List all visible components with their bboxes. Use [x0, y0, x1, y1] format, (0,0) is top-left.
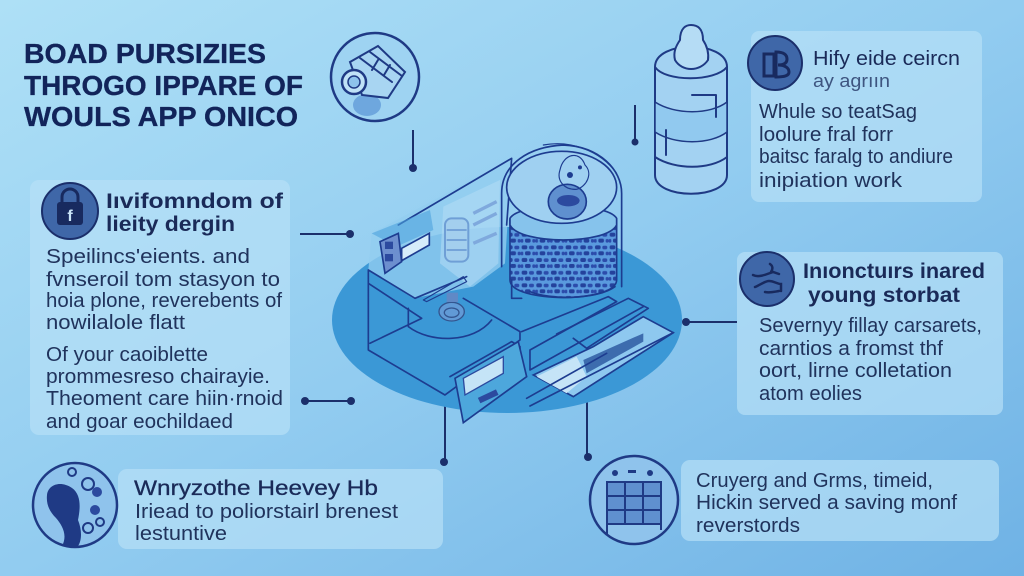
panel text: second paragraph: and goar eochildaed: [46, 411, 233, 433]
panel heading: young storbat: [808, 284, 960, 307]
panel: bottom right: [590, 456, 999, 544]
bottle illustration: [655, 25, 727, 194]
title: BOAD PURSIZIES: [24, 38, 266, 69]
panel: top right: [748, 31, 982, 202]
panel text: reverstords: [696, 515, 800, 537]
panel text: [759, 315, 982, 405]
icon: book badge: [748, 36, 802, 90]
panel text: first paragraph: fvnseroil tom stasyon to: [46, 269, 280, 291]
panel text: [696, 470, 957, 537]
panel text: [134, 477, 398, 545]
panel heading: ay agrıın: [813, 71, 890, 91]
central isometric device illustration: [368, 144, 673, 423]
panel text: lestuntive: [135, 523, 227, 545]
panel text: carntios a fromst thf: [759, 338, 943, 360]
panel text: oort, lirne colletation: [759, 360, 952, 382]
panel heading: Iıvifomndom of: [106, 190, 284, 213]
panel heading: lieity dergin: [106, 213, 235, 236]
panel heading: [106, 190, 284, 236]
panel text: Iriead to poliorstairl brenest: [135, 501, 398, 523]
panel text: baitsc faralg to andiure: [759, 146, 953, 168]
panel text: Cruyerg and Grms, timeid,: [696, 470, 933, 492]
panel text: Wnryzothe Heevey Hb: [134, 477, 378, 500]
icon: head silhouette with flowers: [33, 463, 117, 547]
icon: figure badge: [740, 252, 794, 306]
panel text: loolure fral forr: [759, 124, 893, 146]
panel text: Severnyy fillay carsarets,: [759, 315, 982, 337]
panel: left: [30, 180, 290, 435]
title: WOULS APP ONICO: [24, 101, 298, 132]
panel: bottom left: [33, 463, 443, 549]
panel text: inipiation work: [759, 170, 903, 192]
icon: storage shelf: [590, 456, 678, 544]
translucent back panel: [368, 158, 512, 298]
panel heading: [813, 48, 960, 91]
panel: right: [737, 252, 1003, 415]
panel text: second paragraph: [46, 344, 283, 433]
connector lines: [300, 105, 737, 466]
icon: padlock badge: f: [67, 208, 73, 225]
icon: padlock badge: [42, 183, 98, 239]
glass dome jar: [502, 144, 622, 298]
panel text: second paragraph: Theoment care hiin·rnoid: [46, 388, 283, 410]
box body: [368, 270, 520, 395]
panel heading: Hify eide ceircn: [813, 48, 960, 70]
panel text: first paragraph: hoia plone, reverebents of: [46, 290, 282, 312]
panel text: first paragraph: nowilalole flatt: [46, 312, 185, 334]
lower drawers: [450, 297, 673, 423]
panel heading: Inıonctuırs inared: [803, 260, 985, 283]
title: THROGO IPPARE OF: [24, 70, 303, 101]
panel text: Hickin served a saving monf: [696, 492, 957, 514]
panel text: first paragraph: [46, 246, 282, 334]
panel heading: [803, 260, 985, 307]
small control unit: [380, 233, 429, 273]
central blue ellipse platform: [332, 227, 682, 413]
panel text: Whule so teatSag: [759, 101, 917, 123]
panel text: first paragraph: Speilincs'eients. and: [46, 246, 250, 268]
panel text: [759, 101, 953, 192]
title: [24, 38, 303, 132]
top circular icon: engine part: [331, 33, 419, 121]
panel text: atom eolies: [759, 383, 862, 405]
panel text: second paragraph: Of your caoiblette: [46, 344, 208, 366]
panel text: second paragraph: prommesreso chairayie.: [46, 366, 270, 388]
